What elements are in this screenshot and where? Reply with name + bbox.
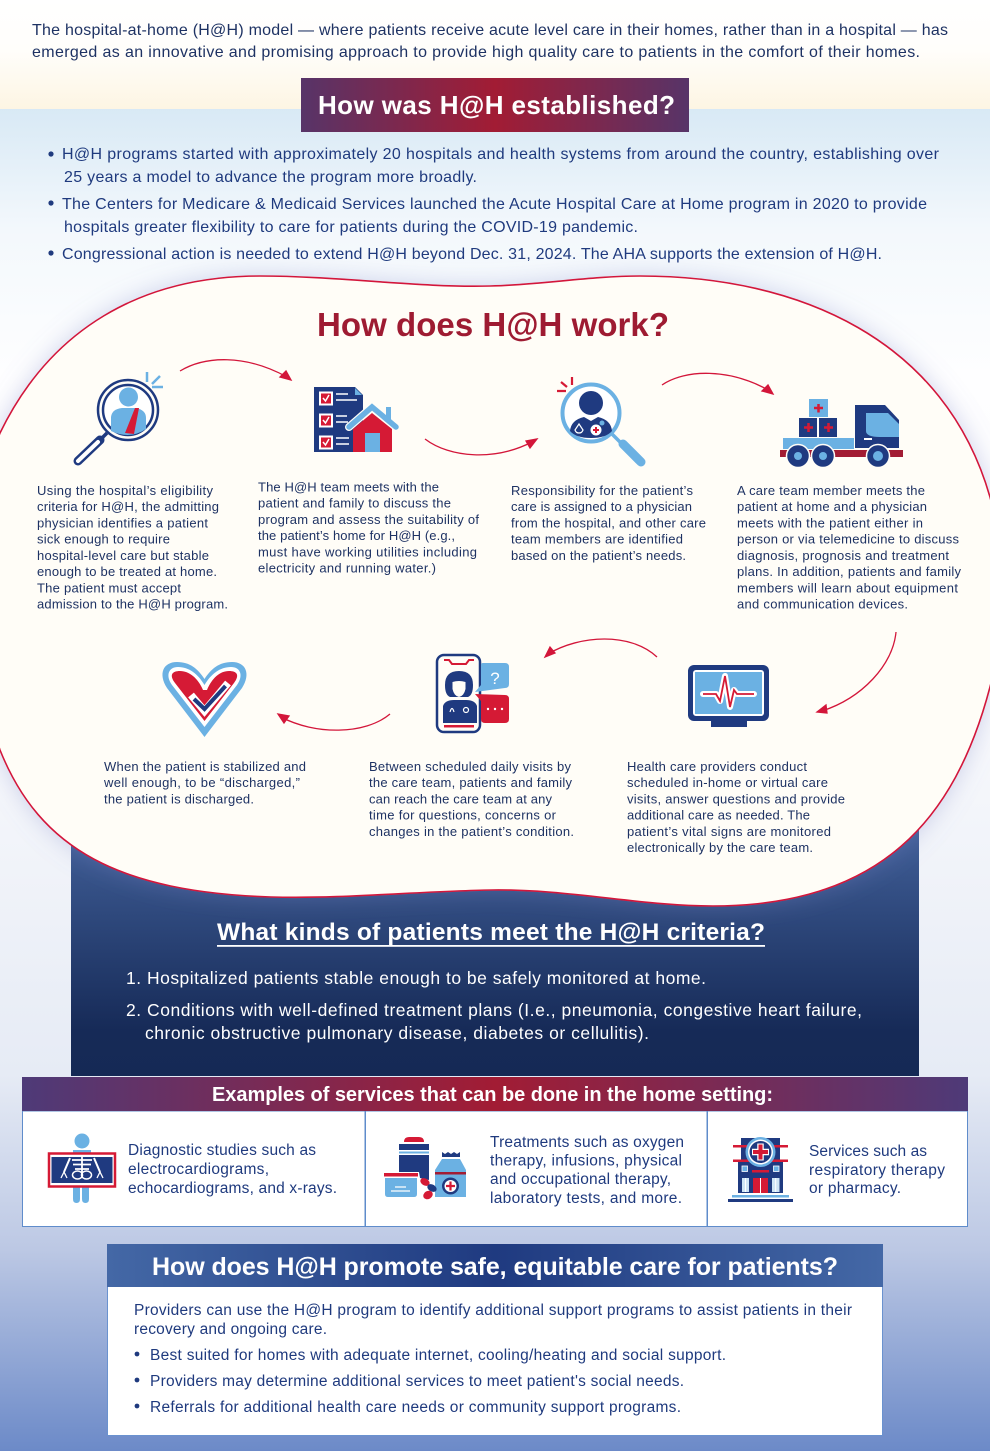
bullet list: establishment facts: 25 years a model to advance the program more broadly.	[64, 169, 477, 186]
step 6 text: between visits: Between scheduled daily visits by	[369, 759, 572, 774]
step 4 text: plans. In addition, patients and family	[737, 564, 962, 579]
arrow: step 4 to 5	[817, 632, 896, 713]
step 2 text: must have working utilities including	[258, 544, 477, 560]
heading banner: how was H@H established	[301, 78, 689, 132]
bullet list: establishment facts: H@H programs started with approximately 20 hospitals and health systems from around the country, establishing over	[62, 146, 940, 163]
step 4 text: diagnosis, prognosis and treatment	[737, 548, 949, 563]
card text: diagnostic studies: Diagnostic studies such as	[128, 1142, 316, 1159]
step 1 text: criteria for H@H, the admitting	[37, 499, 219, 514]
step 1 text: physician identifies a patient	[37, 516, 208, 530]
bullet list: establishment facts: Congressional action is needed to extend H@H beyond Dec. 31, 2024. The AHA supports the extension of H@H.	[62, 246, 882, 263]
step 5 text: discharge: When the patient is stabilized and	[104, 759, 306, 774]
card text: diagnostic studies: echocardiograms, and x-rays.	[128, 1180, 337, 1197]
panel: safe equitable care	[107, 1244, 883, 1436]
bullet list: establishment facts: The Centers for Medicare & Medicaid Services launched the Acute Hospital Care at Home program in 2020 to provide	[62, 196, 927, 213]
icon: monitor with heartbeat	[688, 665, 769, 727]
step 2 text: the patient’s home for H@H (e.g.,	[258, 528, 455, 543]
arrow: step 2 to 3	[425, 439, 537, 455]
step 2 text: The H@H team meets with the	[258, 480, 439, 494]
step 4 text: and communication devices.	[737, 597, 908, 612]
step 6 text: between visits: time for questions, concerns or	[369, 808, 557, 823]
bullet list: establishment facts: hospitals greater flexibility to care for patients during the COVID-19 pandemic.	[64, 219, 638, 236]
arrow: step 5 to 6	[545, 639, 657, 657]
step 6 text: between visits	[369, 759, 574, 839]
text: safe equitable care details: Providers may determine additional services to meet patient's social needs.	[150, 1373, 684, 1390]
step 1 text: admission to the H@H program.	[37, 597, 228, 612]
card text: treatments: therapy, infusions, physical	[490, 1152, 682, 1170]
step 1 text: Using the hospital’s eligibility	[37, 483, 214, 498]
step 1 text: enough to be treated at home.	[37, 564, 217, 579]
icon: heart with check mark	[162, 662, 247, 737]
card text: treatments	[490, 1134, 684, 1207]
panel: services examples	[22, 1077, 968, 1226]
section: patient criteria text: chronic obstructive pulmonary disease, diabetes or cellulitis).	[145, 1023, 649, 1043]
icon: delivery truck	[780, 399, 903, 468]
step 1 text	[37, 483, 228, 612]
card text: services	[809, 1143, 945, 1197]
step 6 text: between visits: the care team, patients and family	[369, 775, 572, 790]
heading banner: how was H@H established: How was H@H established?	[318, 90, 675, 120]
heading: safe equitable care	[107, 1244, 883, 1287]
section: patient criteria text: 1. Hospitalized patients stable enough to be safely monitored at home.	[126, 968, 706, 988]
step 3 text: care is assigned to a physician	[511, 499, 692, 514]
step 7 text: care visits: visits, answer questions and provide	[627, 792, 845, 806]
section: patient criteria text: What kinds of patients meet the H@H criteria?	[217, 919, 765, 946]
step 5 text: discharge: the patient is discharged.	[104, 792, 254, 806]
text: safe equitable care details: Best suited for homes with adequate internet, cooling/heating and social support.	[150, 1347, 726, 1364]
step 2 text: patient and family to discuss the	[258, 496, 451, 511]
step 5 text: discharge: well enough, to be “discharged,”	[103, 775, 300, 790]
step 2 text	[258, 480, 479, 576]
step 6 text: between visits: changes in the patient’s condition.	[369, 824, 574, 839]
bullet list: establishment facts	[48, 146, 940, 263]
icon: magnifier over physician	[557, 377, 641, 462]
panel: services examples: Examples of services that can be done in the home setting:	[212, 1084, 773, 1106]
step 1 text: hospital-level care but stable	[37, 548, 209, 563]
step 4 text: members will learn about equipment	[737, 580, 958, 596]
card text: diagnostic studies: electrocardiograms,	[128, 1161, 269, 1178]
icon: medicine bottles	[384, 1137, 466, 1201]
step 7 text: care visits	[627, 759, 845, 855]
heading: how does H@H work: How does H@H work?	[317, 306, 669, 343]
step 4 text: A care team member meets the	[737, 483, 925, 498]
text: safe equitable care details	[134, 1302, 852, 1416]
step 2 text: program and assess the suitability of	[258, 512, 479, 527]
step 7 text: care visits: Health care providers conduct	[627, 759, 807, 774]
icon: phone with physician and chat bubbles: ?	[490, 669, 500, 688]
icon: hospital building	[728, 1137, 793, 1202]
text: safe equitable care details: Providers can use the H@H program to identify additional support programs to assist patients in their	[134, 1302, 852, 1319]
text: safe equitable care details: Referrals for additional health care needs or community support programs.	[150, 1399, 681, 1416]
step 1 text: sick enough to require	[37, 532, 170, 547]
heading: safe equitable care: How does H@H promote safe, equitable care for patients?	[152, 1253, 838, 1281]
icon: checklist and house	[314, 387, 396, 452]
step 4 text: meets with the patient either in	[737, 516, 923, 530]
icon: x-ray	[49, 1134, 115, 1203]
step 2 text: electricity and running water.)	[258, 561, 436, 576]
step 7 text: care visits: electronically by the care team.	[627, 840, 813, 855]
card text: treatments: and occupational therapy,	[490, 1171, 671, 1188]
step 3 text: Responsibility for the patient’s	[511, 483, 694, 498]
step 1 text: The patient must accept	[37, 580, 181, 596]
step 5 text: discharge	[103, 759, 306, 806]
intro text	[32, 22, 948, 61]
card text: services: respiratory therapy	[809, 1162, 945, 1179]
step 4 text	[737, 483, 962, 612]
panel: how does H@H work blob	[0, 276, 990, 906]
step 4 text: person or via telemedicine to discuss	[737, 532, 960, 547]
card text: treatments: laboratory tests, and more.	[490, 1190, 682, 1207]
card text: services: Services such as	[809, 1143, 927, 1160]
step 3 text: team members are identified	[511, 532, 683, 547]
section: patient criteria text: 2. Conditions with well-defined treatment plans (I.e., pneumonia, congestive heart failure,	[126, 1000, 862, 1020]
step 6 text: between visits: can reach the care team at any	[369, 792, 552, 806]
card text: diagnostic studies	[128, 1142, 337, 1197]
step 4 text: patient at home and a physician	[737, 499, 927, 514]
section: patient criteria text	[126, 919, 862, 1043]
arrow: step 1 to 2	[180, 360, 291, 380]
panel: patient criteria background	[71, 780, 919, 1076]
arrow: step 6 to 7	[278, 714, 390, 730]
step 7 text: care visits: additional care as needed. The	[627, 808, 810, 823]
icon: phone with physician and chat bubbles	[437, 655, 509, 732]
step 7 text: care visits: patient’s vital signs are monitored	[627, 824, 831, 839]
card text: treatments: Treatments such as oxygen	[490, 1134, 684, 1151]
step 3 text	[511, 483, 706, 563]
step 3 text: based on the patient’s needs.	[511, 548, 686, 563]
arrow: step 3 to 4	[662, 373, 773, 394]
step 7 text: care visits: scheduled in-home or virtual care	[627, 775, 828, 790]
intro text: emerged as an innovative and promising approach to provide high quality care to patients in the comfort of their homes.	[32, 44, 920, 61]
step 3 text: from the hospital, and other care	[511, 516, 706, 530]
icon: magnifier over patient	[78, 372, 163, 461]
card text: services: or pharmacy.	[809, 1180, 901, 1197]
intro text: The hospital-at-home (H@H) model — where patients receive acute level care in their homes, rather than in a hospital — has	[32, 22, 948, 39]
text: safe equitable care details: recovery and ongoing care.	[134, 1321, 327, 1338]
